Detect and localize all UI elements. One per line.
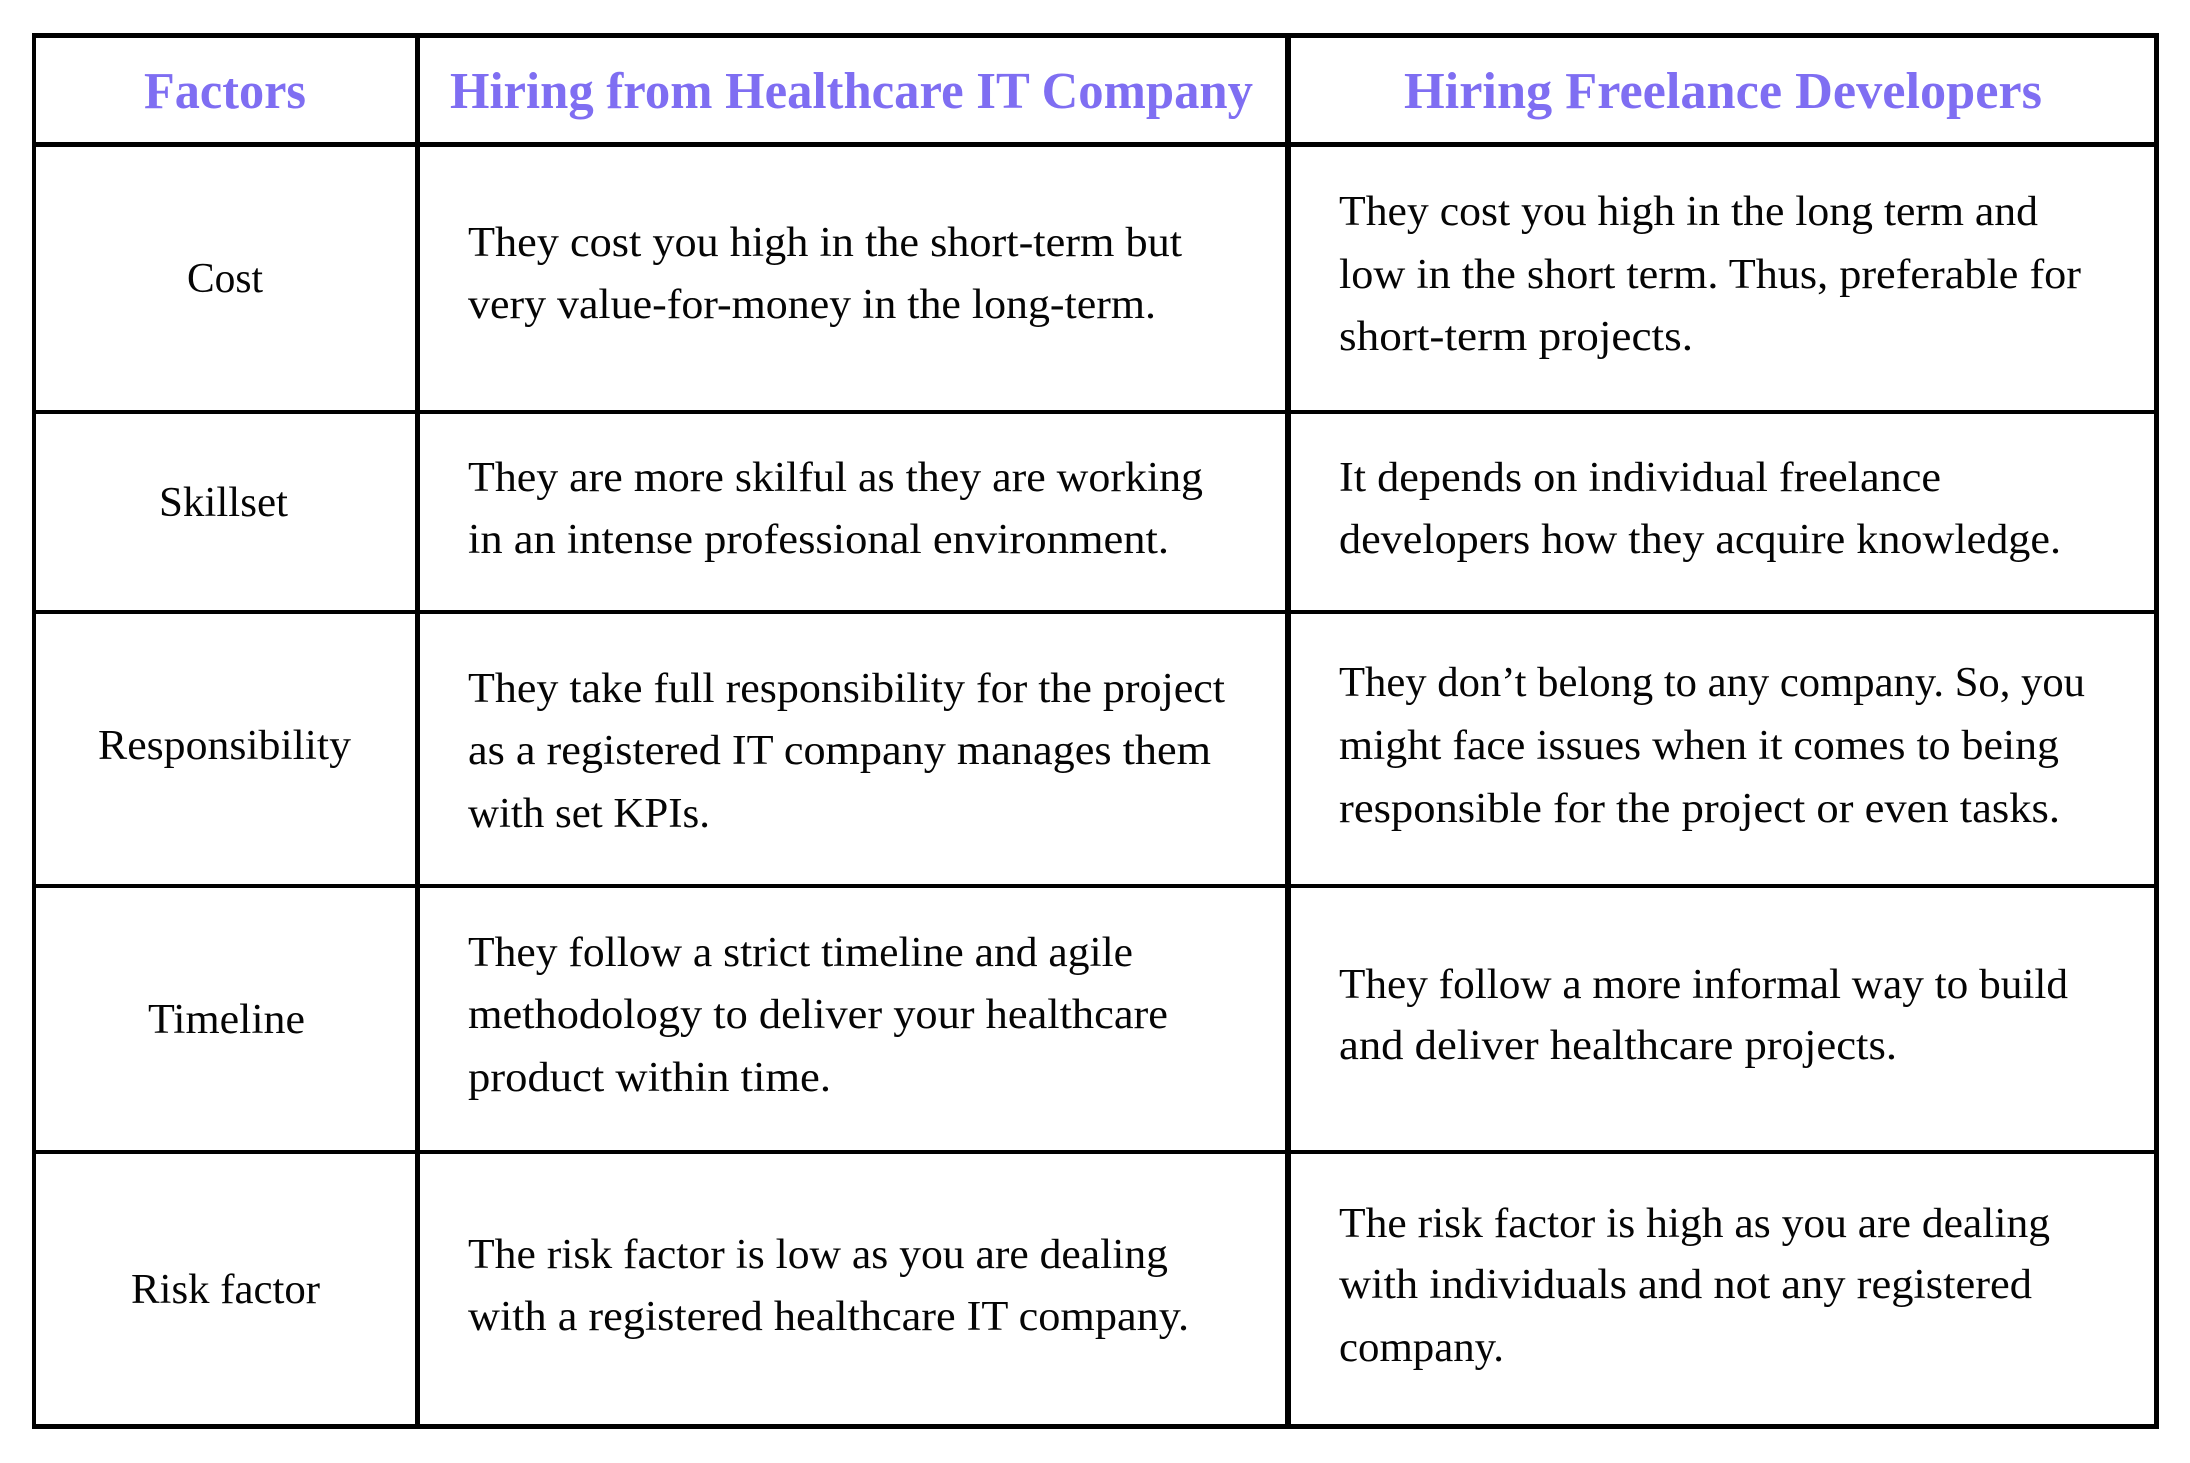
factor label: Cost: Cost (187, 256, 263, 302)
company text: Timeline: product within time. (468, 1055, 831, 1101)
freelance text: Responsibility: might face issues when it comes to being (1339, 723, 2059, 769)
heading: Hiring from Healthcare IT Company: Hiring from Healthcare IT Company (450, 63, 1253, 120)
row: Skillset (159, 455, 2061, 563)
company text: Responsibility: They take full responsibility for the project (468, 666, 1225, 712)
company text: Responsibility: as a registered IT company manages them (468, 728, 1211, 774)
freelance text: Skillset: It depends on individual freelance (1339, 455, 1941, 501)
company text: Responsibility: with set KPIs. (468, 791, 710, 837)
factor label: Timeline: Timeline (148, 997, 305, 1043)
company text: Cost: They cost you high in the short-term but (468, 220, 1182, 266)
freelance text: Responsibility: They don’t belong to any company. So, you (1339, 660, 2085, 706)
freelance text: Responsibility: responsible for the project or even tasks. (1339, 786, 2060, 832)
freelance text: Cost: low in the short term. Thus, preferable for (1339, 252, 2081, 298)
freelance text: Skillset (1339, 455, 2061, 563)
row: Timeline (148, 930, 2068, 1101)
factor label: Risk factor: Risk factor (131, 1267, 320, 1313)
company text: Skillset (468, 455, 1203, 563)
company text: Timeline: methodology to deliver your healthcare (468, 992, 1168, 1038)
heading: Factors: Factors (144, 63, 306, 120)
freelance text: Risk factor: with individuals and not any registered (1339, 1262, 2032, 1308)
freelance text: Responsibility (1339, 660, 2085, 832)
row: Cost (187, 189, 2081, 360)
company text: Cost: very value-for-money in the long-term. (468, 282, 1156, 328)
freelance text: Skillset: developers how they acquire knowledge. (1339, 517, 2061, 563)
factor label: Responsibility: Responsibility (98, 723, 351, 769)
row: Risk factor (131, 1201, 2050, 1371)
row: Responsibility (98, 660, 2085, 837)
company text: Responsibility (468, 666, 1225, 837)
company text: Timeline (468, 930, 1168, 1101)
freelance text: Risk factor: company. (1339, 1325, 1504, 1371)
freelance text: Cost (1339, 189, 2081, 360)
company text: Risk factor (468, 1232, 1189, 1340)
heading: Hiring Freelance Developers: Hiring Freelance Developers (1404, 63, 2042, 120)
freelance text: Risk factor: The risk factor is high as you are dealing (1339, 1201, 2050, 1247)
freelance text: Timeline (1339, 962, 2068, 1069)
company text: Risk factor: with a registered healthcare IT company. (468, 1294, 1189, 1340)
company text: Timeline: They follow a strict timeline and agile (468, 930, 1133, 976)
freelance text: Cost: short-term projects. (1339, 314, 1693, 360)
freelance text: Cost: They cost you high in the long term and (1339, 189, 2038, 235)
company text: Cost (468, 220, 1182, 328)
freelance text: Timeline: They follow a more informal way to build (1339, 962, 2068, 1008)
company text: Risk factor: The risk factor is low as you are dealing (468, 1232, 1168, 1278)
factor label: Skillset: Skillset (159, 480, 288, 526)
freelance text: Risk factor (1339, 1201, 2050, 1371)
header row (144, 63, 2042, 120)
company text: Skillset: in an intense professional environment. (468, 517, 1169, 563)
freelance text: Timeline: and deliver healthcare projects. (1339, 1023, 1897, 1069)
company text: Skillset: They are more skilful as they are working (468, 455, 1203, 501)
